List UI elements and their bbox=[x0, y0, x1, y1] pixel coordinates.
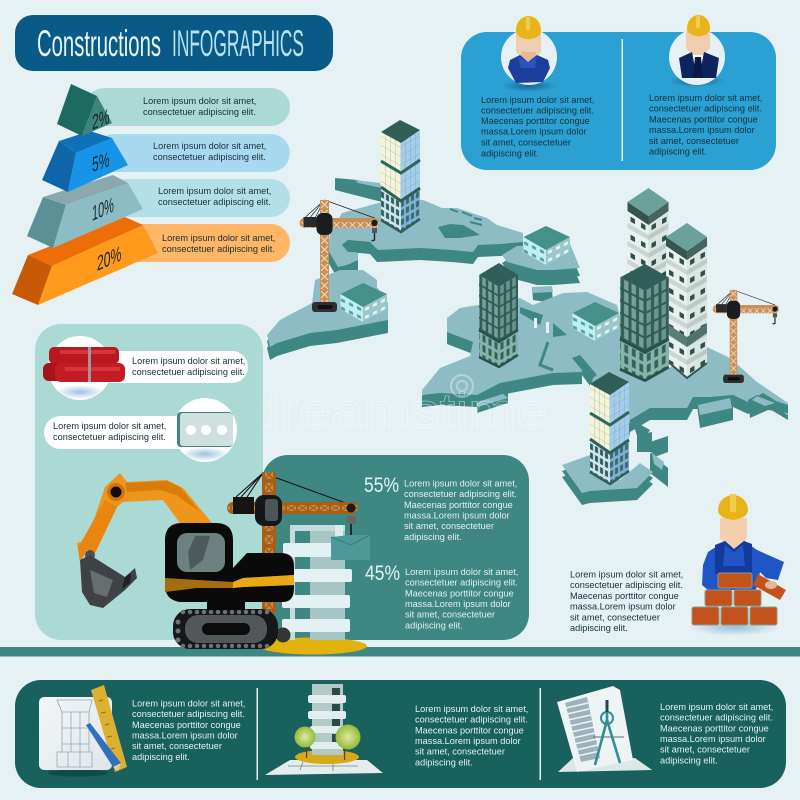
block 3 text: sit amet, consectetuer bbox=[660, 745, 750, 755]
block 1 text: Lorem ipsum dolor sit amet, bbox=[132, 698, 245, 708]
pyramid block: 20% bbox=[12, 217, 158, 305]
stat: 45%: massa.Lorem ipsum dolor bbox=[405, 599, 511, 609]
engineer text: massa.Lorem ipsum dolor bbox=[649, 125, 755, 135]
pyramid block: 2%: 2% bbox=[92, 104, 110, 135]
brick icon and label bbox=[44, 398, 237, 462]
block 3 text: adipiscing elit. bbox=[660, 755, 718, 765]
engineer text: consectetuer adipiscing elit. bbox=[649, 104, 762, 114]
low building: south america bbox=[340, 283, 387, 322]
block 3 text: Lorem ipsum dolor sit amet, bbox=[660, 702, 773, 712]
engineer text: Maecenas porttitor congue bbox=[649, 114, 758, 124]
stat: 55% bbox=[364, 474, 517, 542]
block 3 text: Maecenas porttitor congue bbox=[660, 723, 769, 733]
icon: plans with compass bbox=[557, 686, 652, 772]
block 2 text: Lorem ipsum dolor sit amet, bbox=[415, 704, 528, 714]
stat: 45%: Maecenas porttitor congue bbox=[405, 588, 514, 598]
block 3 text: consectetuer adipiscing elit. bbox=[660, 713, 773, 723]
block 2 text: sit amet, consectetuer bbox=[415, 747, 505, 757]
panel: percentages bbox=[262, 455, 529, 640]
pyramid chart bbox=[12, 84, 290, 305]
crane: americas bbox=[300, 200, 380, 312]
pyramid block: 10%: 10% bbox=[92, 193, 114, 226]
block 2 text: massa.Lorem ipsum dolor bbox=[415, 736, 521, 746]
tower: white front bbox=[666, 223, 707, 378]
illustration: excavator bbox=[77, 473, 294, 649]
pyramid block: 2% bbox=[57, 84, 112, 136]
worker text: consectetuer adipiscing elit. bbox=[481, 106, 594, 116]
worker text: Lorem ipsum dolor sit amet, bbox=[481, 95, 594, 105]
bricklayer text: Maecenas porttitor congue bbox=[570, 591, 679, 601]
block 1 text: Maecenas porttitor congue bbox=[132, 720, 241, 730]
worker text: massa.Lorem ipsum dolor bbox=[481, 127, 587, 137]
title banner: INFOGRAPHICS bbox=[172, 23, 304, 64]
stat: 55%: consectetuer adipiscing elit. bbox=[404, 489, 517, 499]
stat: 55%: adipiscing elit. bbox=[404, 532, 462, 542]
pyramid tier pill: 10%: Lorem ipsum dolor sit amet, bbox=[158, 186, 271, 196]
worker text: sit amet, consectetuer bbox=[481, 138, 571, 148]
block 1 text: consectetuer adipiscing elit. bbox=[132, 709, 245, 719]
stat: 55%: Maecenas porttitor congue bbox=[404, 500, 513, 510]
pyramid tier pill: 5%: Lorem ipsum dolor sit amet, bbox=[153, 141, 266, 151]
excavator tracks bbox=[173, 609, 290, 649]
icon: blueprint with ruler and pencil bbox=[39, 685, 127, 776]
excavator body bbox=[165, 523, 294, 610]
block 1 text: adipiscing elit. bbox=[132, 752, 190, 762]
block 2 text: Maecenas porttitor congue bbox=[415, 725, 524, 735]
engineer text: sit amet, consectetuer bbox=[649, 136, 739, 146]
stat: 45%: consectetuer adipiscing elit. bbox=[405, 578, 518, 588]
pyramid block: 5%: 5% bbox=[92, 147, 110, 177]
illustration: building under construction bbox=[282, 525, 352, 640]
title banner bbox=[15, 15, 333, 71]
stat: 45%: Lorem ipsum dolor sit amet, bbox=[405, 567, 518, 577]
tower: dark africa bbox=[479, 263, 518, 367]
block 1 text: massa.Lorem ipsum dolor bbox=[132, 730, 238, 740]
block 3 text: massa.Lorem ipsum dolor bbox=[660, 734, 766, 744]
continent: australia bbox=[562, 455, 653, 505]
pyramid block: 10% bbox=[27, 175, 143, 248]
excavator arm bbox=[77, 473, 212, 562]
stat: 45%: 45% bbox=[365, 562, 400, 585]
dynamite icon and label bbox=[43, 336, 248, 400]
pyramid tier pill: 20%: consectetuer adipiscing elit. bbox=[162, 244, 275, 254]
bricklayer text: massa.Lorem ipsum dolor bbox=[570, 602, 676, 612]
watermark: dreamstime bbox=[248, 383, 548, 439]
pyramid tier pill: 10% bbox=[105, 179, 290, 217]
stat: 55%: 55% bbox=[364, 474, 399, 497]
stat: 55%: Lorem ipsum dolor sit amet, bbox=[404, 478, 517, 488]
continent: south america bbox=[267, 270, 388, 360]
tower: blue australia bbox=[590, 372, 629, 484]
block 2 text: adipiscing elit. bbox=[415, 757, 473, 767]
engineer text: adipiscing elit. bbox=[649, 147, 707, 157]
worker text: adipiscing elit. bbox=[481, 148, 539, 158]
engineer text: Lorem ipsum dolor sit amet, bbox=[649, 93, 762, 103]
stat: 55%: massa.Lorem ipsum dolor bbox=[404, 510, 510, 520]
pyramid tier pill: 5% bbox=[95, 134, 290, 172]
tower: white rear bbox=[628, 188, 668, 343]
dynamite icon and label: consectetuer adipiscing elit. bbox=[132, 367, 245, 377]
pyramid tier pill: 10%: consectetuer adipiscing elit. bbox=[158, 197, 271, 207]
ground band bbox=[0, 647, 800, 656]
continent: north america bbox=[328, 178, 580, 285]
illustration: yellow ground bbox=[259, 638, 367, 654]
pyramid tier pill: 2% bbox=[85, 88, 290, 126]
panel: materials bbox=[35, 324, 263, 640]
bricklayer text: adipiscing elit. bbox=[570, 623, 628, 633]
icon: building with trees bbox=[265, 684, 383, 775]
pyramid tier pill: 5%: consectetuer adipiscing elit. bbox=[153, 152, 266, 162]
crane: asia bbox=[713, 290, 779, 383]
title banner: Constructions bbox=[37, 23, 161, 64]
panel: workers bbox=[461, 15, 776, 170]
tower: dark asia bbox=[620, 264, 669, 380]
excavator bucket bbox=[80, 555, 137, 608]
illustration: bricklayer bbox=[688, 494, 786, 636]
stat: 45% bbox=[365, 562, 518, 630]
stat: 45%: sit amet, consectetuer bbox=[405, 610, 495, 620]
pyramid tier pill: 2%: Lorem ipsum dolor sit amet, bbox=[143, 96, 256, 106]
brick icon and label: Lorem ipsum dolor sit amet, bbox=[53, 421, 166, 431]
dynamite icon and label: Lorem ipsum dolor sit amet, bbox=[132, 356, 245, 366]
block 1 text: sit amet, consectetuer bbox=[132, 741, 222, 751]
world map bbox=[267, 120, 788, 505]
bricklayer text: consectetuer adipiscing elit. bbox=[570, 580, 683, 590]
low building: north bbox=[524, 226, 570, 265]
low building: asia bbox=[572, 302, 619, 341]
tower: blue north america bbox=[381, 120, 420, 232]
pyramid tier pill: 2%: consectetuer adipiscing elit. bbox=[143, 107, 256, 117]
stat: 55%: sit amet, consectetuer bbox=[404, 521, 494, 531]
panel: planning bbox=[15, 680, 786, 788]
continent: africa and eurasia bbox=[422, 286, 788, 487]
pyramid block: 20%: 20% bbox=[97, 241, 121, 276]
illustration: tower crane bbox=[227, 472, 370, 613]
pyramid tier pill: 20% bbox=[115, 224, 290, 262]
stat: 45%: adipiscing elit. bbox=[405, 620, 463, 630]
pyramid tier pill: 20%: Lorem ipsum dolor sit amet, bbox=[162, 233, 275, 243]
bricklayer text: Lorem ipsum dolor sit amet, bbox=[570, 570, 683, 580]
worker text: Maecenas porttitor congue bbox=[481, 116, 590, 126]
bricklayer text: sit amet, consectetuer bbox=[570, 612, 660, 622]
pyramid block: 5% bbox=[42, 131, 128, 192]
engineer avatar bbox=[669, 15, 725, 85]
block 2 text: consectetuer adipiscing elit. bbox=[415, 715, 528, 725]
worker avatar bbox=[501, 16, 557, 85]
brick icon and label: consectetuer adipiscing elit. bbox=[53, 432, 166, 442]
